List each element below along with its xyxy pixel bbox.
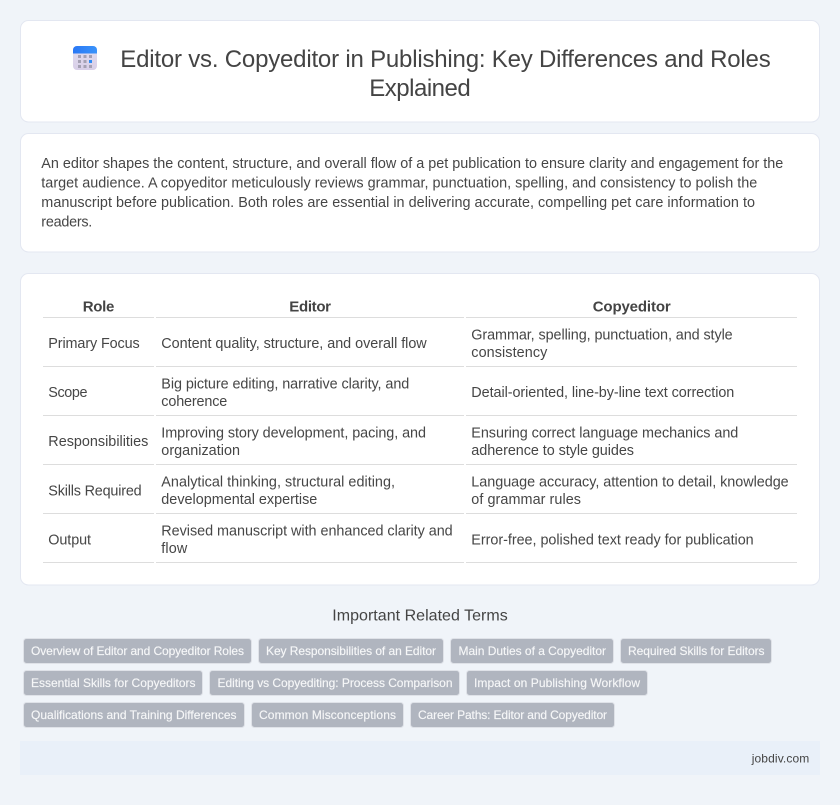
panel: summary paragraph <box>20 134 820 252</box>
table row: primary focus: consistency <box>471 345 548 361</box>
tag: copyeditor skills <box>24 670 202 696</box>
title <box>120 46 771 102</box>
tag: qualifications <box>24 702 244 728</box>
table row: primary focus <box>43 327 797 367</box>
tag: copyeditor duties <box>450 638 614 664</box>
tag: editor responsibilities: Key Responsibilities of an Editor <box>266 644 436 658</box>
heading: important related terms: Important Related Terms <box>332 608 508 625</box>
table row: responsibilities: organization <box>161 443 240 459</box>
tag: career paths: Career Paths: Editor and Copyeditor <box>418 708 607 722</box>
table row: responsibilities: Ensuring correct language mechanics and <box>471 425 738 441</box>
footer: jobdiv.com <box>751 751 809 765</box>
text block: summary: manuscript before publication. Both roles are essential in delivering accurate, compelling pet care information to <box>41 195 755 211</box>
table row: skills required: Language accuracy, attention to detail, knowledge <box>471 474 789 490</box>
title: Editor vs. Copyeditor in Publishing: Key Differences and Roles <box>120 46 771 73</box>
tag: copyeditor duties: Main Duties of a Copyeditor <box>458 644 606 658</box>
table row: skills required: Skills Required <box>48 483 142 499</box>
table header row: Copyeditor <box>593 299 671 316</box>
title: Explained <box>369 75 471 102</box>
table row: output: Error-free, polished text ready for publication <box>471 532 754 548</box>
footer <box>20 741 820 775</box>
table header row <box>43 299 797 318</box>
table header row: Role <box>83 299 114 316</box>
text block: summary: target audience. A copyeditor meticulously reviews grammar, punctuation, spelling, and consistency to polish the <box>41 175 757 191</box>
tag: overview: Overview of Editor and Copyeditor Roles <box>31 644 244 658</box>
table row: skills required: of grammar rules <box>471 492 581 508</box>
table row: scope: Big picture editing, narrative clarity, and <box>161 376 409 392</box>
tag: misconceptions: Common Misconceptions <box>259 708 396 722</box>
table row: skills required <box>43 474 797 514</box>
table row: scope: coherence <box>161 394 227 410</box>
table row: skills required: Analytical thinking, structural editing, <box>161 474 395 490</box>
table row: primary focus: Primary Focus <box>48 336 140 352</box>
tag: editor skills <box>620 638 772 664</box>
table row: primary focus: Content quality, structure, and overall flow <box>161 336 427 352</box>
table row: skills required: developmental expertise <box>161 492 317 508</box>
tag: overview <box>24 638 252 664</box>
table row: scope: Scope <box>48 385 88 401</box>
tag: misconceptions <box>252 702 404 728</box>
related term tags <box>24 638 772 728</box>
tag: workflow impact: Impact on Publishing Workflow <box>474 676 640 690</box>
tag: editor skills: Required Skills for Editors <box>628 644 764 658</box>
table row: output: flow <box>161 541 188 557</box>
table row: scope <box>43 376 797 416</box>
tag: career paths <box>410 702 614 728</box>
table row: scope: Detail-oriented, line-by-line text correction <box>471 385 734 401</box>
tag: process comparison <box>210 670 460 696</box>
tag: qualifications: Qualifications and Training Differences <box>31 708 236 722</box>
table row: output: Revised manuscript with enhanced clarity and <box>161 523 453 539</box>
table row: output <box>43 523 797 563</box>
table header row: Editor <box>289 299 331 316</box>
table row: responsibilities: adherence to style guides <box>471 443 634 459</box>
table row: responsibilities: Improving story development, pacing, and <box>161 425 426 441</box>
text block: summary: An editor shapes the content, structure, and overall flow of a pet publication to ensure clarity and engagement for the <box>41 156 783 172</box>
table row: output: Output <box>48 532 91 548</box>
panel: header <box>20 20 820 122</box>
text block: summary <box>41 156 783 230</box>
tag: copyeditor skills: Essential Skills for Copyeditors <box>31 676 196 690</box>
tag: workflow impact <box>466 670 648 696</box>
text block: summary: readers. <box>41 214 92 230</box>
table row: primary focus: Grammar, spelling, punctuation, and style <box>471 327 733 343</box>
tag: process comparison: Editing vs Copyediting: Process Comparison <box>218 676 452 690</box>
icon: calendar <box>73 46 97 70</box>
table row: responsibilities: Responsibilities <box>48 434 148 450</box>
panel: comparison table <box>20 274 820 585</box>
table row: responsibilities <box>43 425 797 465</box>
tag: editor responsibilities <box>258 638 444 664</box>
